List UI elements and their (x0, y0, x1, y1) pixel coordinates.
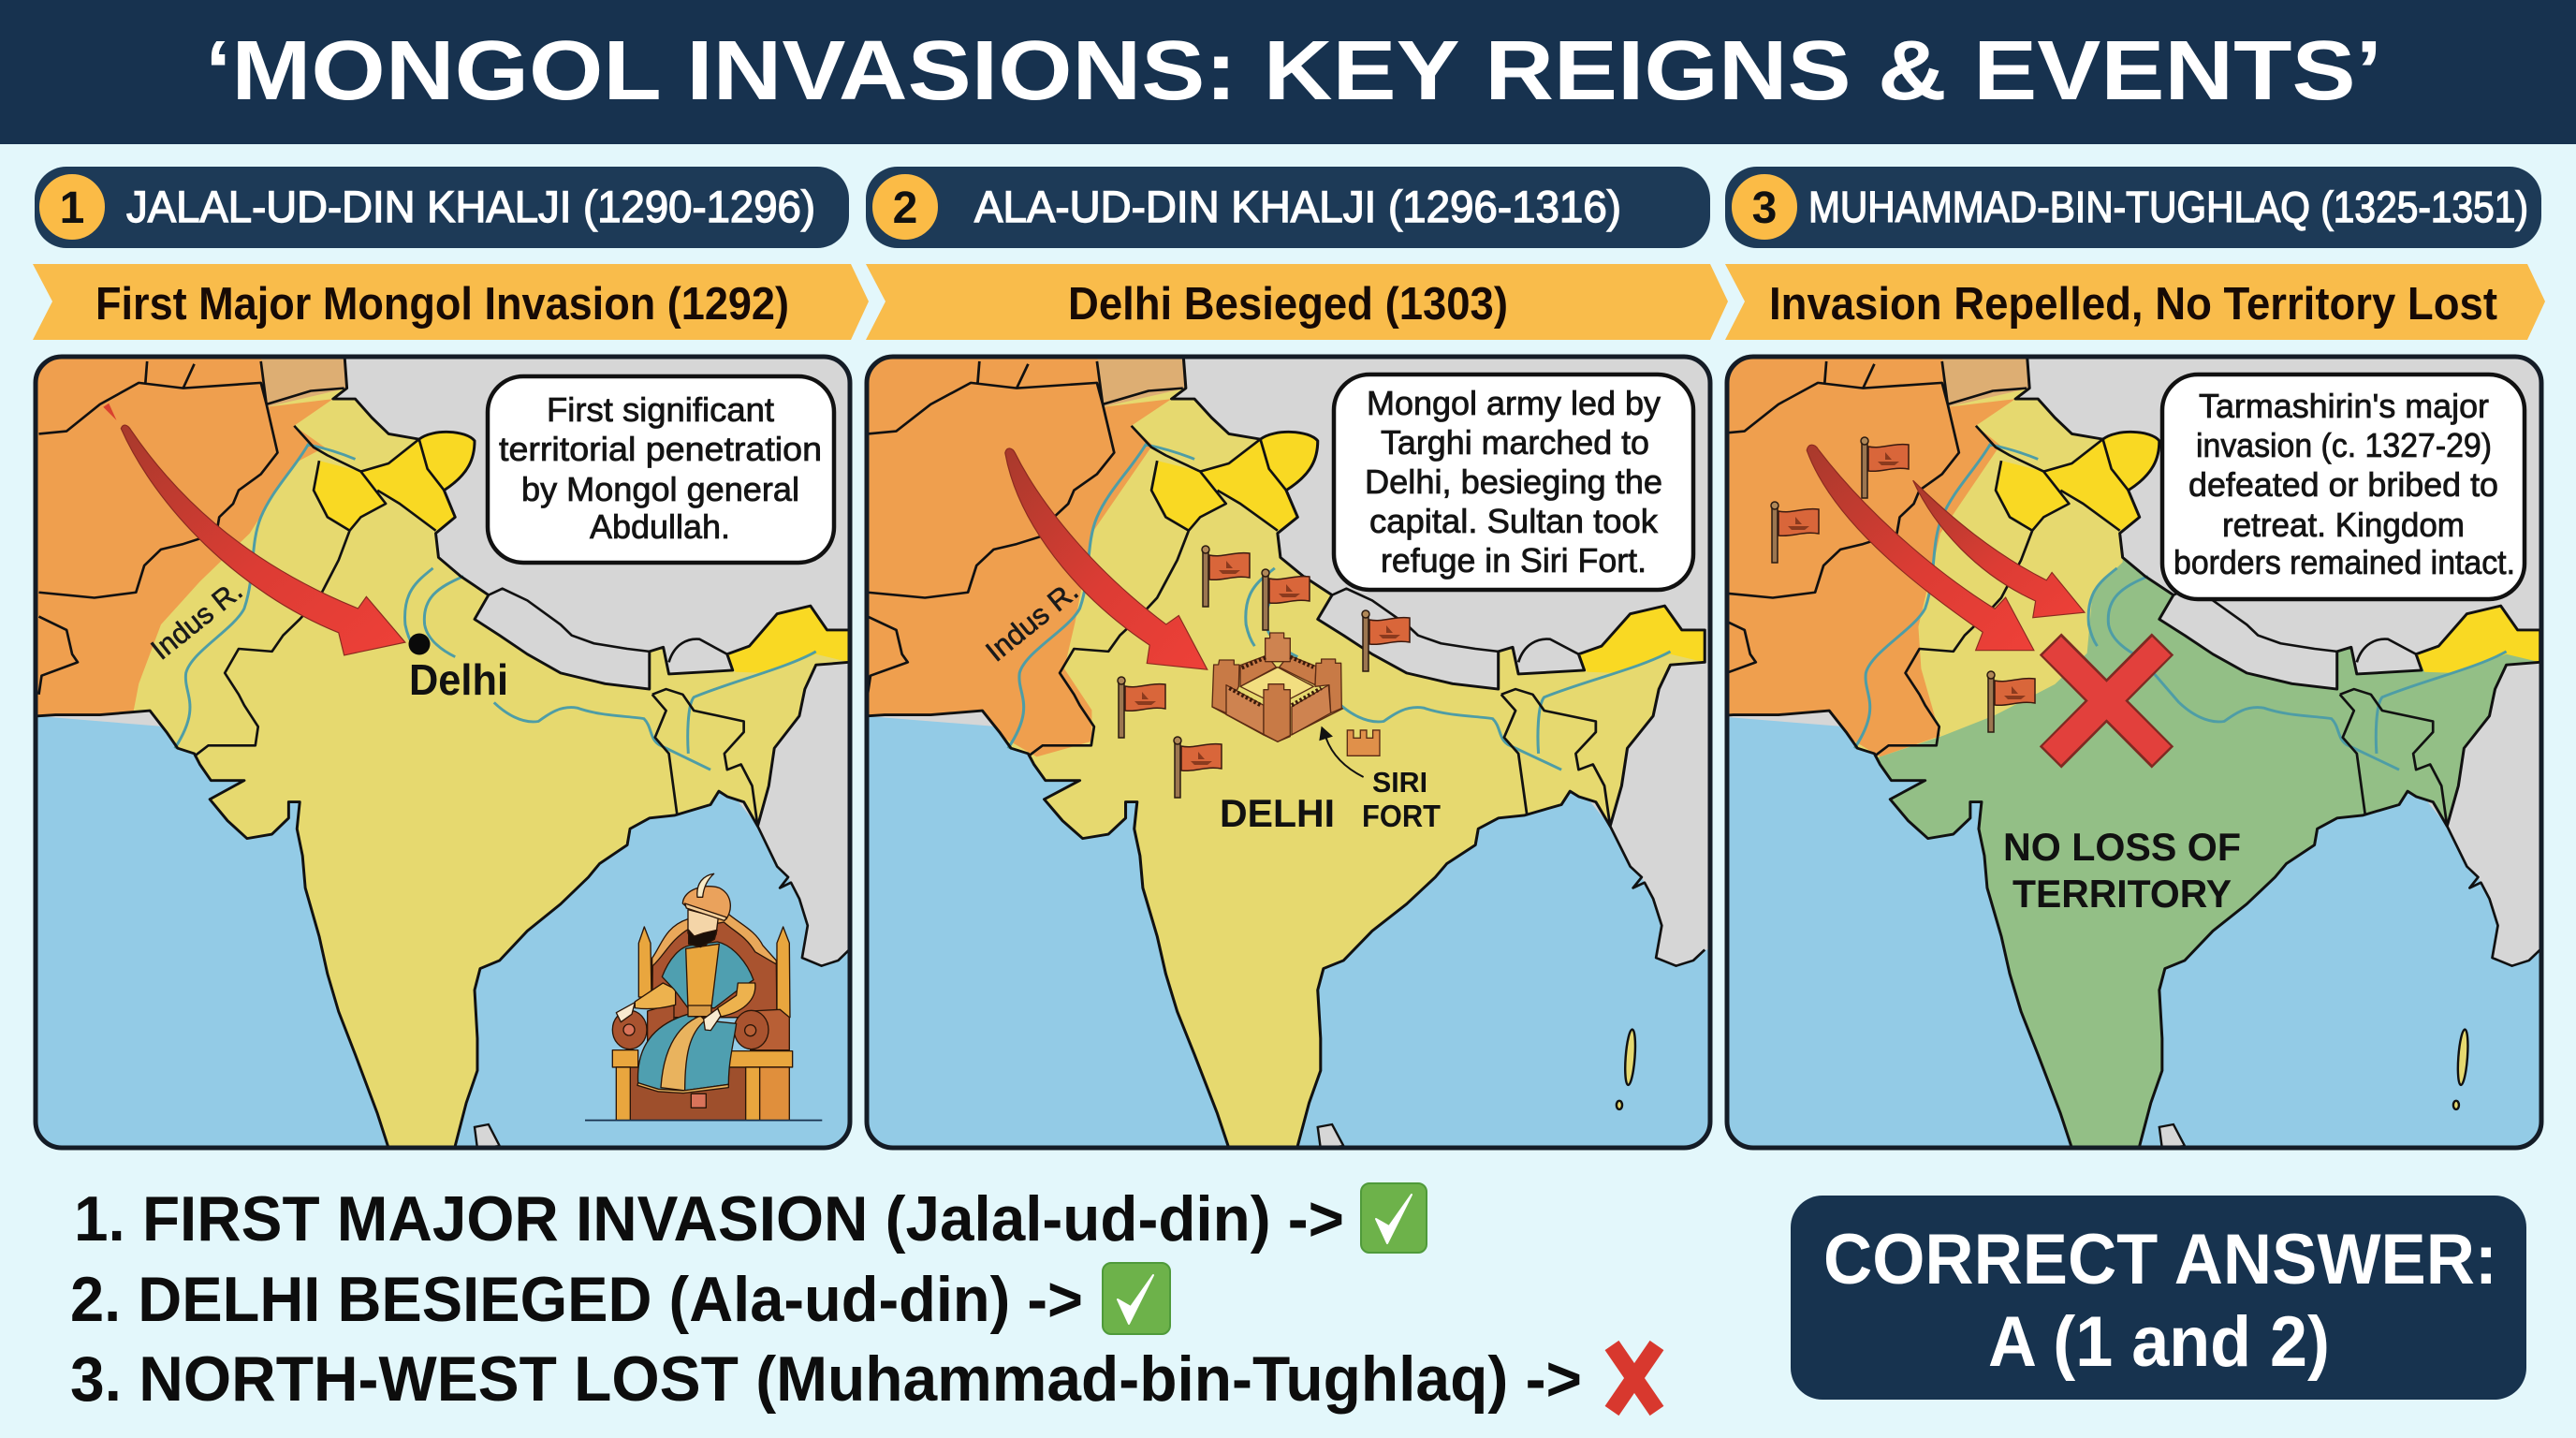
icon: green check 2 (1103, 1263, 1170, 1334)
icon: Siri Fort pointer and tower (1319, 726, 1380, 777)
label: SIRI FORT: SIRI (1372, 766, 1427, 799)
callout: Targhi siege: capital. Sultan took (1369, 502, 1659, 540)
icon: green check 1 (1361, 1183, 1427, 1253)
label: SIRI FORT: FORT (1362, 799, 1441, 833)
icon: sultan on throne (585, 873, 822, 1121)
header pill 1: JALAL-UD-DIN KHALJI (1290-1296) (126, 182, 815, 231)
callout: Targhi siege: refuge in Siri Fort. (1381, 541, 1647, 580)
siege flags, panel 3 (1771, 437, 2035, 732)
panel: Ala-ud-din map (869, 360, 1707, 1146)
callout: Tarmashirin invasion: defeated or bribed to (2188, 465, 2498, 504)
callout: Targhi siege: Targhi marched to (1381, 423, 1649, 462)
map of the subcontinent, panel 1 (37, 360, 848, 1146)
verdict line 3: 3. NORTH-WEST LOST (Muhammad-bin-Tughlaq) -> (70, 1343, 1582, 1415)
label: DELHI: DELHI (1220, 791, 1335, 835)
label: no loss of territory: TERRITORY (2012, 872, 2232, 916)
ribbon 2 (866, 264, 1728, 340)
callout: Tarmashirin invasion (2162, 374, 2525, 599)
callout: Targhi siege: Delhi, besieging the (1365, 462, 1662, 501)
siege flags, panel 2 (1118, 546, 1410, 798)
header pill 3 (1725, 167, 2541, 248)
label: no loss of territory (2003, 825, 2241, 916)
correct answer box: CORRECT ANSWER: (1823, 1220, 2497, 1299)
map of the subcontinent, panel 2 (869, 360, 1707, 1146)
ribbon 2: Delhi Besieged (1303) (1068, 279, 1508, 330)
callout: Tarmashirin invasion: Tarmashirin's major (2199, 387, 2489, 425)
title banner (0, 0, 2576, 144)
correct answer box (1791, 1196, 2526, 1400)
title banner: ‘MONGOL INVASIONS: KEY REIGNS & EVENTS’ (205, 24, 2382, 118)
icon: red cross, invasion repelled (2050, 644, 2162, 757)
ribbon 3 (1725, 264, 2545, 340)
invasion arrows, panel 3 (1807, 445, 2085, 651)
header pill 2 (866, 167, 1710, 248)
label: Delhi: Delhi (409, 655, 508, 704)
callout: first penetration: Abdullah. (590, 507, 730, 546)
panel 1 frame (36, 357, 850, 1148)
verdict line 1: 1. FIRST MAJOR INVASION (Jalal-ud-din) -> (74, 1183, 1344, 1255)
callout: first penetration: by Mongol general (521, 470, 799, 508)
label: Indus R.: Indus R. (145, 574, 248, 666)
header pill 2: 2 (893, 183, 917, 233)
label: no loss of territory: NO LOSS OF (2003, 825, 2241, 869)
correct answer box: A (1 and 2) (1988, 1302, 2330, 1382)
callout: Tarmashirin invasion: borders remained intact. (2174, 543, 2515, 581)
label: Indus R.: Indus R. (979, 574, 1085, 668)
callout: Targhi siege: Mongol army led by (1367, 384, 1661, 422)
invasion arrow, panel 1 (103, 404, 405, 655)
header pill 1: 1 (60, 183, 84, 233)
ribbon 3: Invasion Repelled, No Territory Lost (1769, 279, 2497, 330)
panel: Muhammad-bin-Tughlaq map (1730, 360, 2539, 1146)
invasion arrow, panel 2 (1005, 448, 1208, 669)
callout: Tarmashirin invasion: invasion (c. 1327-29) (2196, 426, 2492, 464)
panel 2 frame (867, 357, 1710, 1148)
ribbon 1 (33, 264, 869, 340)
header pill 2: ALA-UD-DIN KHALJI (1296-1316) (974, 182, 1621, 231)
panel: Jalal-ud-din map (37, 360, 848, 1146)
header pill 3: 3 (1752, 183, 1777, 233)
ribbon 1: First Major Mongol Invasion (1292) (95, 279, 789, 330)
callout: first penetration (488, 376, 834, 563)
label: SIRI FORT (1362, 766, 1441, 833)
callout: first penetration: territorial penetration (499, 430, 822, 468)
header pill 1 (35, 167, 849, 248)
verdict line 2: 2. DELHI BESIEGED (Ala-ud-din) -> (70, 1264, 1083, 1335)
panel 3 frame (1727, 357, 2541, 1148)
map of the subcontinent, panel 3 (1730, 360, 2539, 1146)
icon: red cross (1612, 1345, 1657, 1411)
callout: Targhi siege (1334, 374, 1693, 590)
Delhi marker (408, 633, 431, 655)
callout: Tarmashirin invasion: retreat. Kingdom (2222, 506, 2465, 544)
icon: besieged Delhi fortress (1212, 633, 1343, 741)
callout: first penetration: First significant (547, 390, 774, 429)
